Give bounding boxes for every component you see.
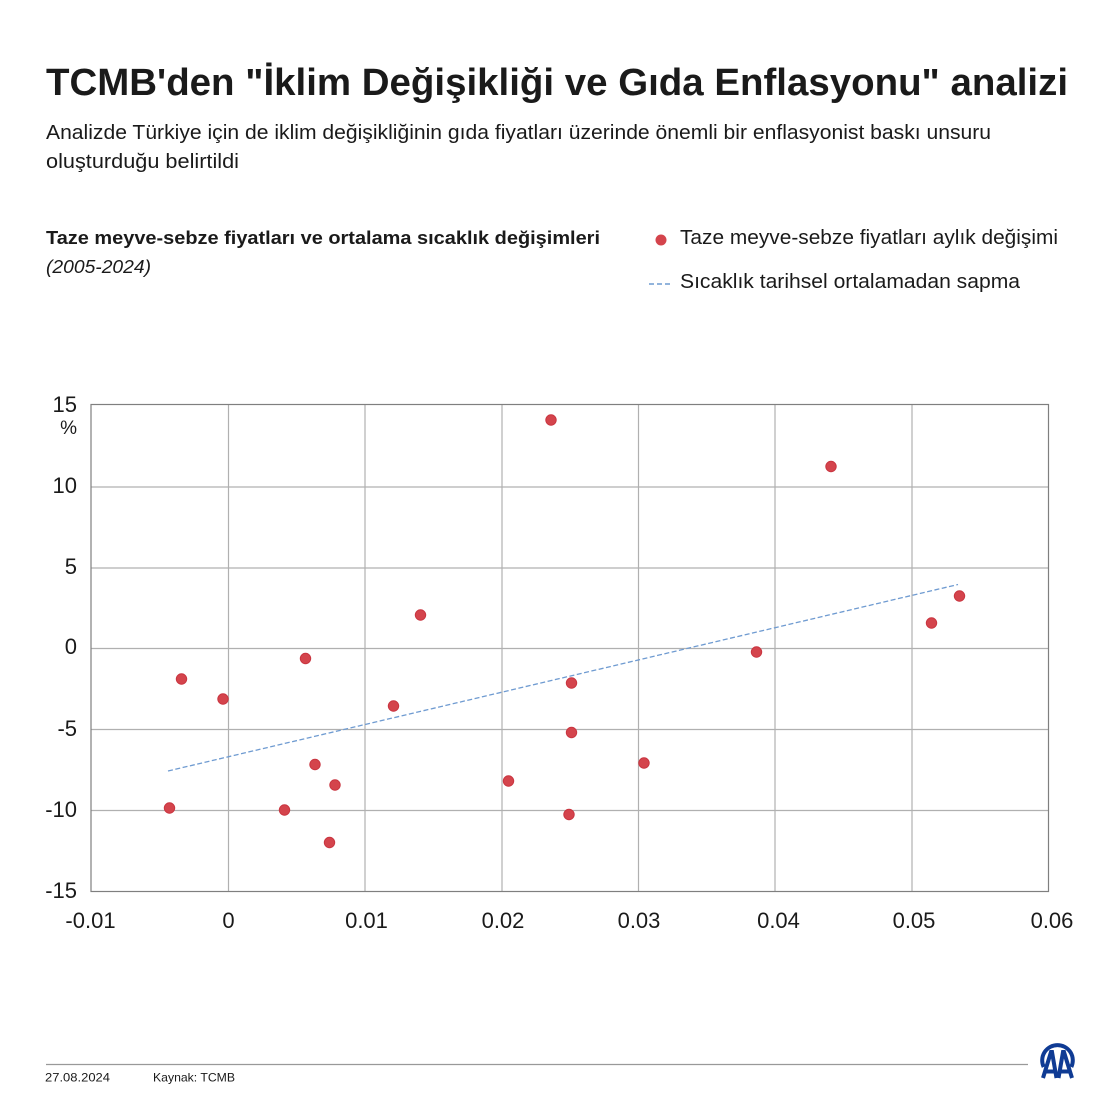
x axis labels: 0.04 (757, 908, 800, 933)
trend line (168, 584, 958, 771)
icon: AA logo (1042, 1045, 1073, 1078)
y axis labels: 5 (65, 554, 77, 579)
x axis labels: 0 (222, 908, 235, 933)
plot frame (91, 404, 1048, 892)
y axis labels: -15 (45, 878, 77, 903)
x axis labels: 0.05 (893, 908, 935, 933)
x axis labels (65, 908, 1073, 933)
legend: dots series: Taze meyve-sebze fiyatları aylık değişimi (680, 227, 1058, 249)
legend (649, 227, 1058, 293)
x axis labels: 0.03 (618, 908, 660, 933)
x axis labels: 0.06 (1031, 908, 1073, 933)
x axis labels: 0.01 (345, 908, 388, 933)
y axis unit: % (60, 418, 77, 439)
y axis labels (45, 392, 77, 903)
x axis labels: 0.02 (482, 908, 524, 933)
footer rule (46, 1064, 1028, 1066)
chart heading: Taze meyve-sebze fiyatları ve ortalama sıcaklık değişimleri (46, 227, 600, 248)
subtitle: oluşturduğu belirtildi (46, 151, 239, 173)
footer source: Kaynak: TCMB (153, 1070, 235, 1084)
footer date: 27.08.2024 (45, 1070, 110, 1084)
data points (164, 415, 965, 848)
subtitle (46, 122, 991, 173)
scatter chart (45, 392, 1073, 933)
y axis labels: 15 (53, 392, 77, 417)
chart heading: (2005-2024) (46, 257, 151, 277)
chart heading (46, 227, 600, 277)
x axis labels: -0.01 (65, 908, 116, 933)
y axis labels: 0 (65, 634, 77, 659)
y axis labels: -5 (57, 716, 77, 741)
y axis labels: -10 (45, 797, 77, 822)
grid lines (91, 405, 1048, 891)
title: TCMB'den "İklim Değişikliği ve Gıda Enflasyonu" analizi (46, 62, 1068, 104)
subtitle: Analizde Türkiye için de iklim değişikliğinin gıda fiyatları üzerinde önemli bir enflasyonist baskı unsuru (46, 122, 991, 144)
y axis labels: 10 (53, 473, 77, 498)
legend: dashed line series: Sıcaklık tarihsel ortalamadan sapma (680, 271, 1021, 293)
